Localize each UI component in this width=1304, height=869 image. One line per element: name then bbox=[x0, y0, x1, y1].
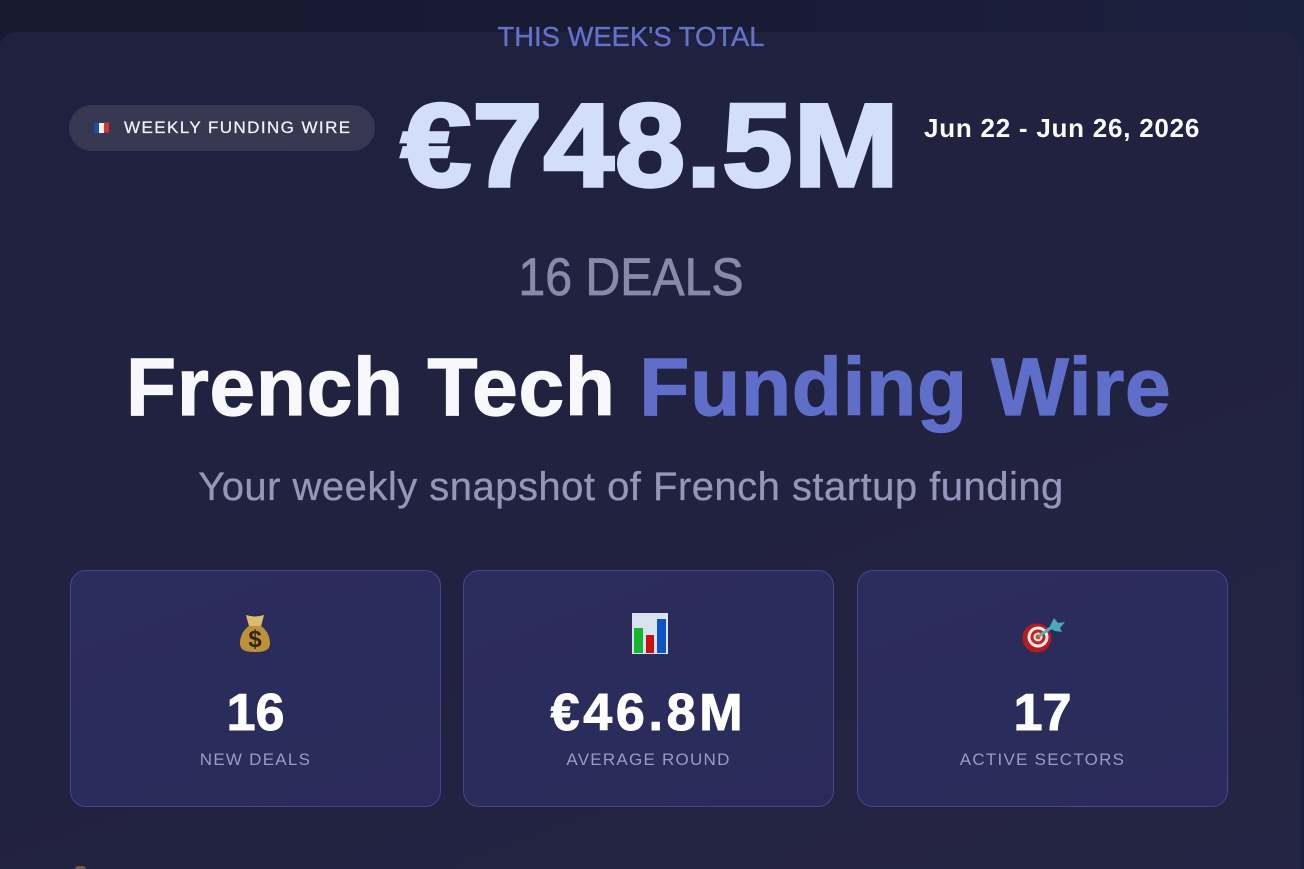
label: AVERAGE ROUND bbox=[566, 750, 731, 769]
stat card: new deals bbox=[70, 570, 441, 807]
title: French Tech Funding Wire bbox=[126, 342, 1171, 433]
value: 16 bbox=[227, 684, 284, 742]
badge label: WEEKLY FUNDING WIRE bbox=[124, 118, 352, 137]
icon: bar chart bbox=[632, 613, 668, 654]
total amount: €748.5M bbox=[401, 80, 900, 212]
eyebrow: this week's total: THIS WEEK'S TOTAL bbox=[497, 21, 765, 52]
icon: money bag: $ bbox=[248, 626, 262, 653]
stat card: active sectors bbox=[857, 570, 1228, 807]
label: NEW DEALS bbox=[200, 750, 311, 769]
date range: Jun 22 - Jun 26, 2026 bbox=[924, 113, 1200, 143]
icon: money bag bbox=[240, 615, 270, 653]
subtitle: Your weekly snapshot of French startup funding bbox=[198, 465, 1064, 509]
value: €46.8M bbox=[551, 684, 746, 742]
icon: French flag bbox=[94, 122, 109, 133]
cropped icon at bottom edge bbox=[75, 866, 86, 869]
label: ACTIVE SECTORS bbox=[960, 750, 1125, 769]
deal count: 16 DEALS bbox=[518, 248, 744, 307]
stat card: average round bbox=[463, 570, 834, 807]
badge: weekly funding wire bbox=[69, 105, 375, 151]
value: 17 bbox=[1014, 684, 1071, 742]
icon: target with dart bbox=[1022, 618, 1065, 652]
